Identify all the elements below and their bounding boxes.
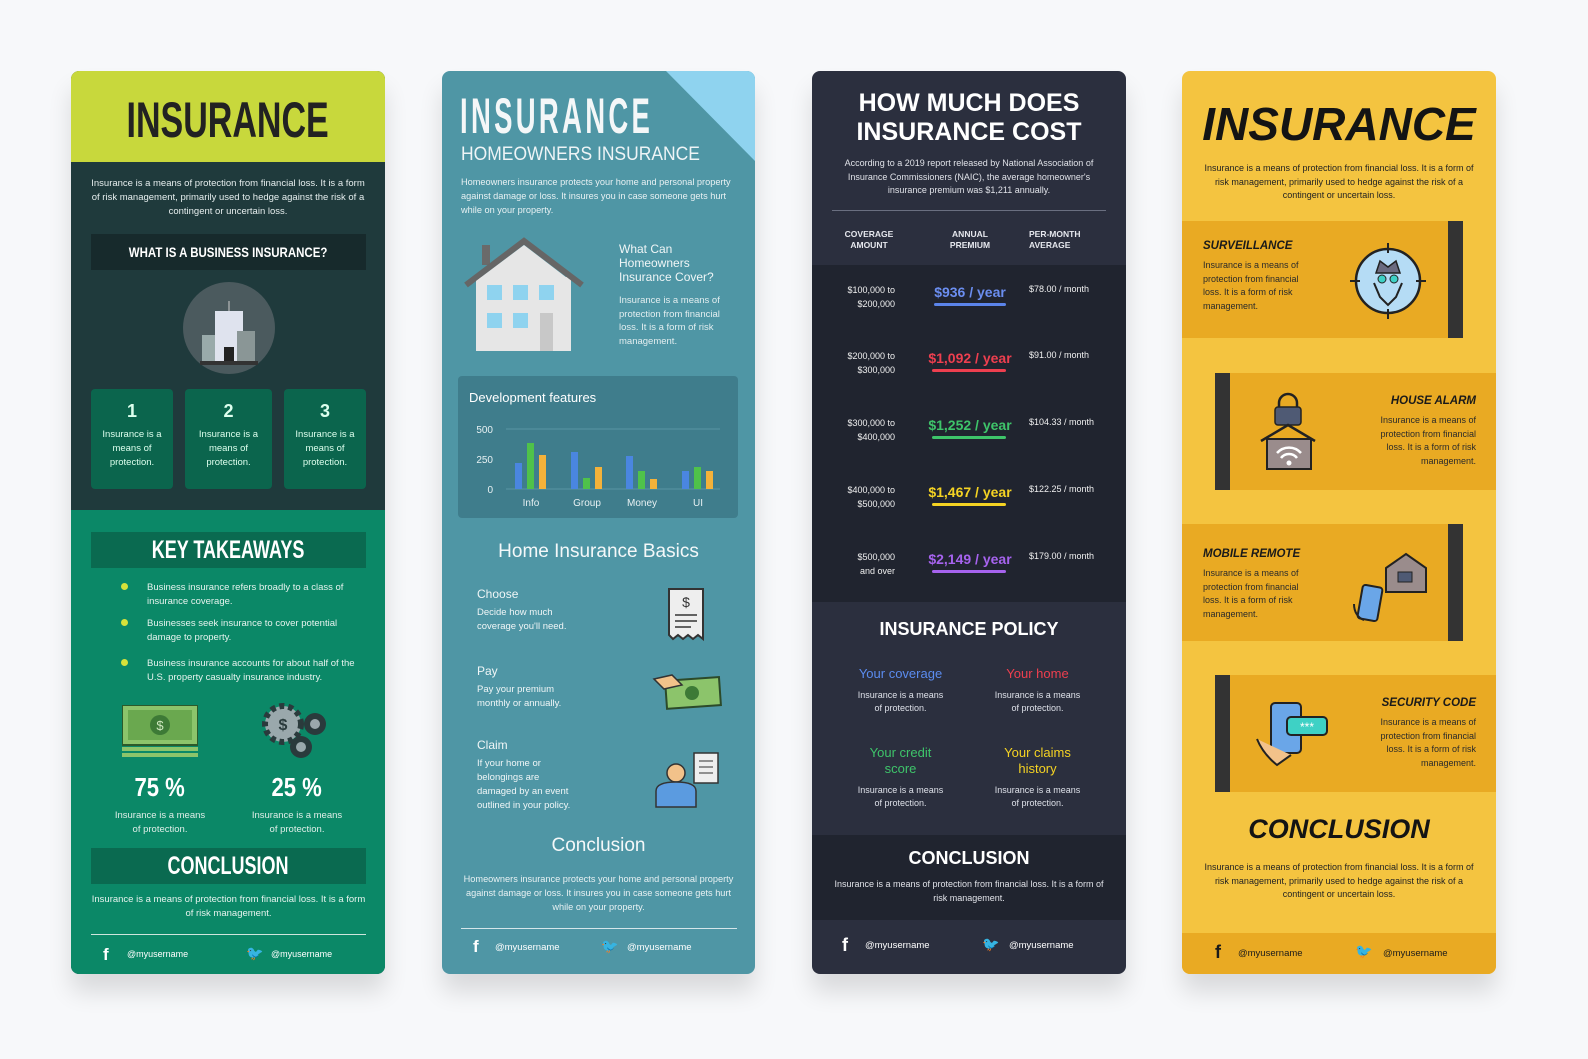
- item: coverage: Insurance is a means: [858, 690, 943, 700]
- box 2: [185, 389, 272, 489]
- box 3: 3: [320, 401, 330, 421]
- box 3: [284, 389, 366, 489]
- band: security code: SECURITY CODE: [1382, 697, 1476, 709]
- step: claim: damaged by an event: [477, 786, 568, 797]
- row 1: $100,000 to: [847, 285, 895, 295]
- item: coverage: [858, 666, 943, 713]
- bullet list: Businesses seek insurance to cover potential damage to property.: [147, 618, 337, 643]
- bullet list: Business insurance accounts for about half of the U.S. property casualty insurance industry.: [147, 658, 355, 683]
- icon: gears: [262, 703, 326, 758]
- item: credit: Insurance is a means: [858, 785, 943, 795]
- bar chart: Money: [627, 498, 657, 509]
- key takeaways heading: KEY TAKEAWAYS: [152, 536, 305, 564]
- row 4: [847, 484, 1094, 508]
- policy grid: [858, 666, 1080, 808]
- box 2: protection.: [206, 457, 251, 468]
- item: credit: of protection.: [874, 798, 927, 808]
- three numbered boxes: [91, 389, 366, 489]
- social footer: [1182, 933, 1496, 974]
- title: INSURANCE: [1202, 98, 1476, 150]
- intro text: Insurance is a means of protection from financial loss. It is a form of risk management, primarily used to hedge against the risk of a contingent or uncertain loss.: [1204, 163, 1474, 200]
- step: choose: Decide how much: [477, 607, 553, 618]
- step: claim: [477, 738, 570, 811]
- policy heading: INSURANCE POLICY: [879, 619, 1058, 639]
- stat 25%: of protection.: [270, 824, 324, 835]
- header band: [71, 71, 385, 162]
- icon: gears: $: [279, 717, 288, 734]
- icon: bill: [668, 588, 704, 641]
- step: choose: [477, 587, 566, 632]
- row 2: $200,000 to: [847, 351, 895, 361]
- step: pay: [477, 664, 561, 709]
- step: choose: Choose: [477, 587, 518, 601]
- icon: building: [183, 282, 275, 374]
- social footer: 🐦: [601, 938, 618, 954]
- title: INSURANCE COST: [856, 118, 1082, 146]
- box 3: means of: [305, 443, 345, 454]
- icon: house alarm: [1260, 392, 1316, 470]
- band: mobile remote: [1182, 524, 1463, 641]
- band: surveillance: Insurance is a means of protection from financial loss. It is a form of risk management.: [1203, 260, 1299, 311]
- icon: spy target: [1350, 243, 1426, 319]
- subtitle: HOMEOWNERS INSURANCE: [461, 144, 700, 165]
- conclusion section: CONCLUSION: [908, 848, 1030, 868]
- item: claims: of protection.: [1011, 798, 1064, 808]
- conclusion text: Insurance is a means of protection from financial loss. It is a form of risk management.: [92, 894, 365, 919]
- intro text: Homeowners insurance protects your home and personal property against damage or loss. It insures you in case someone gets hurt while on your property.: [461, 177, 731, 215]
- stat 75%: Insurance is a means: [115, 810, 205, 821]
- step: pay: Pay your premium: [477, 684, 554, 695]
- row 2: $1,092 / year: [928, 350, 1012, 366]
- title: INSURANCE: [127, 92, 329, 148]
- row 3: $104.33 / month: [1029, 417, 1094, 427]
- social footer: @myusername: [495, 942, 560, 953]
- item: home: of protection.: [1011, 702, 1064, 712]
- icon: money: [122, 705, 198, 757]
- title: INSURANCE: [460, 88, 653, 144]
- basics heading: Home Insurance Basics: [498, 541, 699, 562]
- panel: yellow insurance: [1182, 71, 1496, 974]
- bar chart: Group: [573, 498, 601, 509]
- item: coverage: Your coverage: [859, 666, 942, 681]
- social footer: @myusername: [1238, 948, 1303, 959]
- band: house alarm: [1215, 373, 1496, 490]
- cover heading and text: Homeowners: [619, 256, 690, 270]
- row 5: $179.00 / month: [1029, 551, 1094, 561]
- icon: phone security code: [1256, 702, 1328, 766]
- item: claims: Insurance is a means: [995, 785, 1080, 795]
- bar chart: [458, 376, 738, 518]
- row 4: $500,000: [857, 498, 895, 508]
- item: claims: [995, 745, 1080, 808]
- bullet list: Business insurance refers broadly to a class of insurance coverage.: [147, 582, 343, 607]
- row 3: $400,000: [857, 432, 895, 442]
- item: claims: Your claims: [1004, 745, 1071, 760]
- step: choose: coverage you'll need.: [477, 621, 566, 632]
- band: house alarm: HOUSE ALARM: [1391, 395, 1476, 407]
- intro text: Insurance is a means of protection from financial loss. It is a form of risk management, primarily used to hedge against the risk of a contingent or uncertain loss.: [91, 178, 365, 217]
- bar chart: 250: [476, 455, 493, 466]
- box 3: Insurance is a: [295, 429, 355, 440]
- row 1: $78.00 / month: [1029, 284, 1089, 294]
- box 1: [91, 389, 173, 489]
- cover heading and text: Insurance Cover?: [619, 270, 714, 284]
- conclusion section: [812, 835, 1126, 920]
- conclusion heading: [91, 848, 366, 884]
- bar chart: 0: [487, 485, 493, 496]
- box 2: Insurance is a: [199, 429, 258, 440]
- row 1: $936 / year: [934, 284, 1006, 300]
- step: claim: If your home or: [477, 758, 541, 769]
- box 3: protection.: [303, 457, 347, 468]
- item: home: [995, 666, 1080, 713]
- step: claim: belongings are: [477, 772, 539, 783]
- stat 75%: of protection.: [133, 824, 187, 835]
- row 1: [847, 284, 1089, 308]
- social footer: [91, 934, 366, 964]
- row 5: $500,000: [857, 552, 895, 562]
- price table: [812, 265, 1126, 602]
- step: claim: Claim: [477, 738, 508, 752]
- row 5: $2,149 / year: [928, 551, 1012, 567]
- band: house alarm: Insurance is a means of protection from financial loss. It is a form of risk management.: [1380, 415, 1476, 466]
- heading box: WHAT IS A BUSINESS INSURANCE?: [129, 244, 328, 260]
- band: surveillance: [1182, 221, 1463, 338]
- row 4: $122.25 / month: [1029, 484, 1094, 494]
- social footer: 🐦: [982, 936, 999, 952]
- icon: phone security code: ***: [1300, 720, 1314, 734]
- row 4: $400,000 to: [847, 485, 895, 495]
- box 1: 1: [127, 401, 137, 421]
- item: credit: [858, 745, 943, 808]
- cover heading and text: [619, 242, 720, 347]
- table header: AVERAGE: [1029, 240, 1070, 250]
- green section: [71, 510, 385, 974]
- title: [856, 89, 1082, 146]
- row 5: and over: [860, 566, 895, 576]
- intro text: According to a 2019 report released by National Association of Insurance Commissioners (NAIC), the average homeowner's insurance premium was $1,211 annually.: [845, 158, 1093, 195]
- conclusion heading: CONCLUSION: [168, 852, 289, 880]
- conclusion text: Insurance is a means of protection from financial loss. It is a form of risk management, primarily used to hedge against the risk of a contingent or uncertain loss.: [1204, 862, 1474, 899]
- row 2: [847, 350, 1089, 374]
- icon: money: $: [156, 718, 164, 733]
- icon: cash hand: [652, 674, 722, 710]
- stat 75%: [115, 772, 205, 835]
- social footer: f: [842, 935, 848, 955]
- stat 25%: [252, 772, 342, 835]
- row 2: $91.00 / month: [1029, 350, 1089, 360]
- box 1: Insurance is a: [102, 429, 162, 440]
- bar chart: 500: [476, 425, 493, 436]
- social footer: @myusername: [271, 949, 332, 959]
- band: surveillance: SURVEILLANCE: [1203, 240, 1292, 252]
- item: credit: score: [885, 761, 916, 776]
- row 1: $200,000: [857, 298, 895, 308]
- social footer: 🐦: [1355, 943, 1372, 959]
- social footer: @myusername: [865, 940, 930, 951]
- band: mobile remote: MOBILE REMOTE: [1203, 548, 1300, 560]
- social footer: @myusername: [1009, 940, 1074, 951]
- social footer: @myusername: [1383, 948, 1448, 959]
- cover heading and text: Insurance is a means of protection from financial loss. It is a form of risk management.: [619, 295, 720, 347]
- step: pay: monthly or annually.: [477, 698, 561, 709]
- bar chart: UI: [693, 498, 703, 509]
- social footer: @myusername: [627, 942, 692, 953]
- social footer: @myusername: [127, 949, 188, 959]
- conclusion section: Insurance is a means of protection from financial loss. It is a form of risk management.: [834, 879, 1104, 902]
- band: security code: Insurance is a means of protection from financial loss. It is a form of risk management.: [1380, 717, 1476, 768]
- icon: person with document: [655, 752, 719, 808]
- row 4: $1,467 / year: [928, 484, 1012, 500]
- social footer: 🐦: [246, 945, 263, 961]
- social footer: f: [1215, 942, 1221, 962]
- icon: bill: $: [682, 594, 690, 610]
- heading box: [91, 234, 366, 270]
- panel: dark cost: [812, 71, 1126, 974]
- icon: phone and house: [1353, 552, 1427, 622]
- cover heading and text: What Can: [619, 242, 672, 256]
- bar chart: Info: [523, 498, 540, 509]
- key takeaways heading: [91, 532, 366, 568]
- social footer: f: [103, 945, 109, 964]
- conclusion heading: Conclusion: [552, 835, 646, 856]
- icon: house: [464, 237, 584, 351]
- band: security code: [1215, 675, 1496, 792]
- stat 75%: 75 %: [135, 772, 185, 802]
- row 5: [857, 551, 1094, 576]
- conclusion text: Homeowners insurance protects your home and personal property against damage or loss. It insures you in case someone gets hurt while on your property.: [464, 874, 733, 912]
- step: pay: Pay: [477, 664, 498, 678]
- title: HOW MUCH DOES: [859, 89, 1079, 117]
- corner triangle: [666, 71, 755, 161]
- table header: COVERAGE: [845, 229, 893, 239]
- table header: [845, 229, 1080, 250]
- step: claim: outlined in your policy.: [477, 800, 570, 811]
- table header: PER-MONTH: [1029, 229, 1080, 239]
- panel: green insurance: [71, 71, 385, 974]
- item: home: Insurance is a means: [995, 690, 1080, 700]
- row 2: $300,000: [857, 364, 895, 374]
- row 3: $300,000 to: [847, 418, 895, 428]
- panel: teal homeowners: [442, 71, 755, 974]
- bullet list: [121, 582, 355, 683]
- social footer: f: [473, 937, 479, 956]
- box 2: means of: [209, 443, 248, 454]
- stat 25%: 25 %: [272, 772, 322, 802]
- table header: ANNUAL: [952, 229, 988, 239]
- table header: PREMIUM: [950, 240, 990, 250]
- box 1: protection.: [110, 457, 154, 468]
- item: claims: history: [1018, 761, 1057, 776]
- row 3: [847, 417, 1094, 442]
- table header: AMOUNT: [850, 240, 888, 250]
- item: home: Your home: [1006, 666, 1069, 681]
- item: credit: Your credit: [870, 745, 931, 760]
- conclusion heading: CONCLUSION: [1248, 814, 1430, 844]
- social footer: [461, 928, 737, 958]
- box 2: 2: [223, 401, 234, 421]
- row 3: $1,252 / year: [928, 417, 1012, 433]
- box 1: means of: [112, 443, 152, 454]
- social footer: [842, 935, 1074, 955]
- bar chart: Development features: [469, 390, 596, 405]
- item: coverage: of protection.: [874, 702, 927, 712]
- stat 25%: Insurance is a means: [252, 810, 342, 821]
- band: mobile remote: Insurance is a means of protection from financial loss. It is a form of risk management.: [1203, 568, 1299, 619]
